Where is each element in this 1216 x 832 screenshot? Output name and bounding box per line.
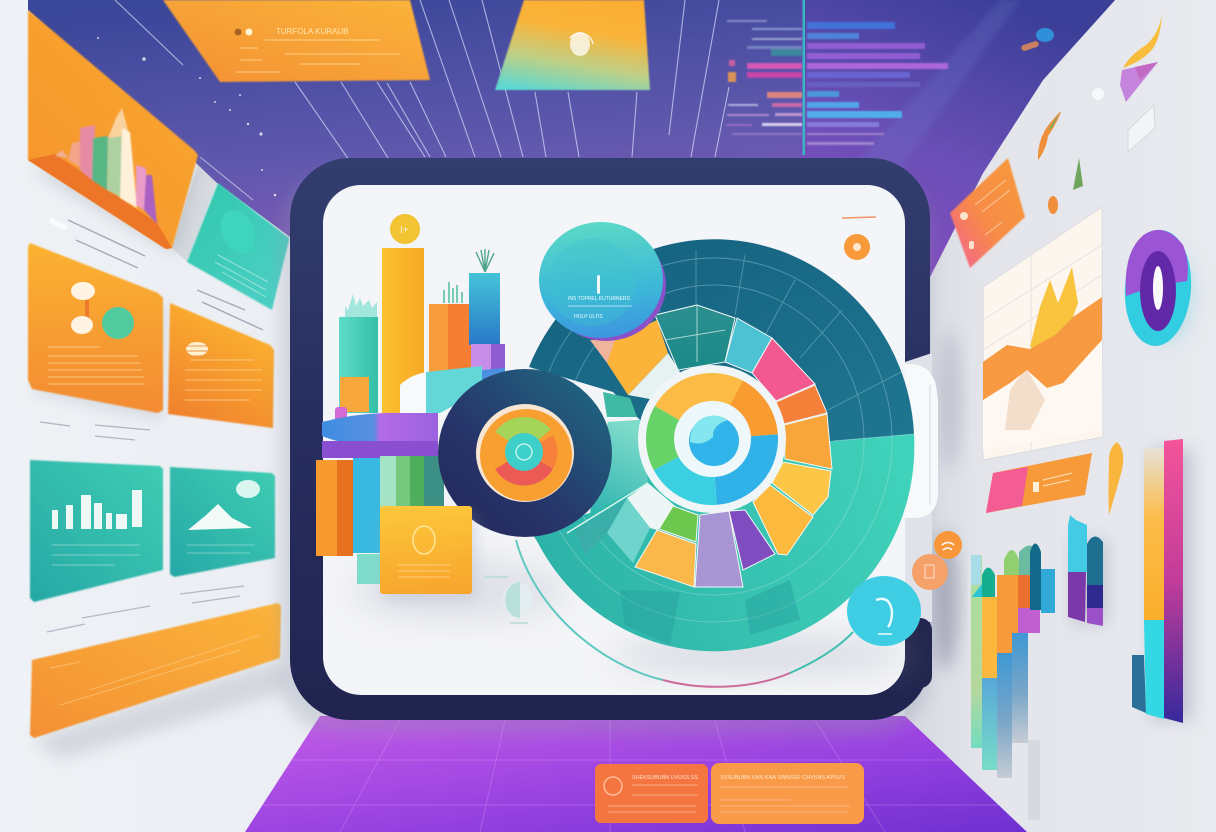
- ceiling rays: [115, 0, 729, 200]
- chart: mid stacked bars: [1068, 515, 1108, 626]
- bar: teal with spikes: [339, 294, 378, 413]
- text block: left wall caption 1: [50, 220, 145, 268]
- icon: pale half circle: [484, 577, 533, 623]
- bar: small orange: [340, 377, 369, 412]
- icon: yellow coin: I+: [400, 225, 409, 236]
- floor: purple grid: [245, 716, 1027, 832]
- panel: top orange card: [163, 0, 430, 82]
- area chart: [55, 108, 157, 224]
- right wall: grey card: [1128, 105, 1155, 152]
- panel: yellow icon card: [380, 506, 475, 600]
- bar: blue: [469, 273, 500, 345]
- panel: top orange card: TURFOLA KURAUB: [276, 27, 348, 36]
- teal bubble callout: HOLP ULTIS: [574, 314, 603, 320]
- wheel base: dark upper half: [529, 239, 914, 441]
- bar: tall yellow: [382, 248, 424, 414]
- white side handle: [905, 364, 938, 518]
- white gap behind ring: [628, 353, 680, 400]
- icons: orange badges: [912, 531, 962, 590]
- arc line: [516, 540, 853, 687]
- icon: yellow coin: [390, 214, 420, 244]
- bars cluster: 3D bar chart: [316, 214, 505, 584]
- text block: left wall caption 4: [47, 586, 244, 632]
- mint wedge: [590, 420, 648, 513]
- panel: orange card with pills: [28, 243, 165, 420]
- disk: blue purple: [322, 413, 438, 458]
- panel: orange card with stack icon: [168, 303, 274, 428]
- slab: white and cyan: [400, 366, 505, 413]
- panel: teal mountain card: [170, 467, 275, 577]
- teal bubble callout: INS TOPREL KUTURNERS: [568, 296, 631, 302]
- icon: plant: [476, 249, 494, 272]
- icon: yellow drop: [1108, 442, 1123, 515]
- segments: [607, 305, 832, 587]
- dark disc with orange gauge: [438, 369, 612, 537]
- chart: fading bar cluster: [971, 544, 1055, 820]
- icon: grass: [444, 282, 462, 303]
- panel: floor cards: SHEKSUBUBN UVUSS SS: [632, 775, 698, 781]
- panel: orange chart card: [28, 10, 200, 255]
- right wall: purple cyan donut: [1121, 228, 1195, 348]
- cube: lilac: [471, 344, 505, 370]
- band: [983, 297, 1102, 400]
- right wall: decorative leaves: [1038, 88, 1104, 214]
- peaks: [1030, 267, 1078, 350]
- bars: lower row: [316, 456, 444, 584]
- wheel base: teal lower half: [530, 420, 914, 651]
- panel: teal note card: [187, 183, 289, 310]
- central donut: [638, 365, 786, 513]
- right wall: banner card: [986, 453, 1092, 513]
- darker teal cells: [620, 580, 800, 645]
- ceiling: purple starfield: [28, 0, 1115, 300]
- right wall: pink-orange note card: [950, 158, 1025, 268]
- text block: left wall caption 3: [40, 422, 150, 440]
- text block: left wall caption 2: [197, 290, 263, 330]
- chart: radial wheel: [529, 239, 914, 651]
- right wall: blue gem on ceiling: [1021, 28, 1054, 52]
- panel: top trapezoid card: [495, 0, 650, 90]
- chart: top horizontal bars: [726, 0, 948, 155]
- icon: cyan question bubble: [847, 576, 921, 646]
- panel: floor cards: [595, 763, 864, 824]
- bar: orange: [429, 304, 482, 374]
- panel: teal bar chart card: [30, 460, 163, 602]
- panel: main frame: [280, 158, 932, 735]
- icon: orange ring target: [842, 217, 876, 260]
- right wall: ribbon and purple wedge: [1120, 15, 1162, 102]
- right wall: area chart panel: [983, 207, 1103, 460]
- panel: floor cards: SSSUBUBN UNS KNA SWNSSF CHVSNS KPSVS: [720, 775, 845, 781]
- mini bars: [52, 490, 142, 529]
- panel: wide orange banner: [30, 603, 290, 760]
- chart: tall stacked bar: [1132, 439, 1192, 723]
- teal bubble callout: [539, 222, 666, 341]
